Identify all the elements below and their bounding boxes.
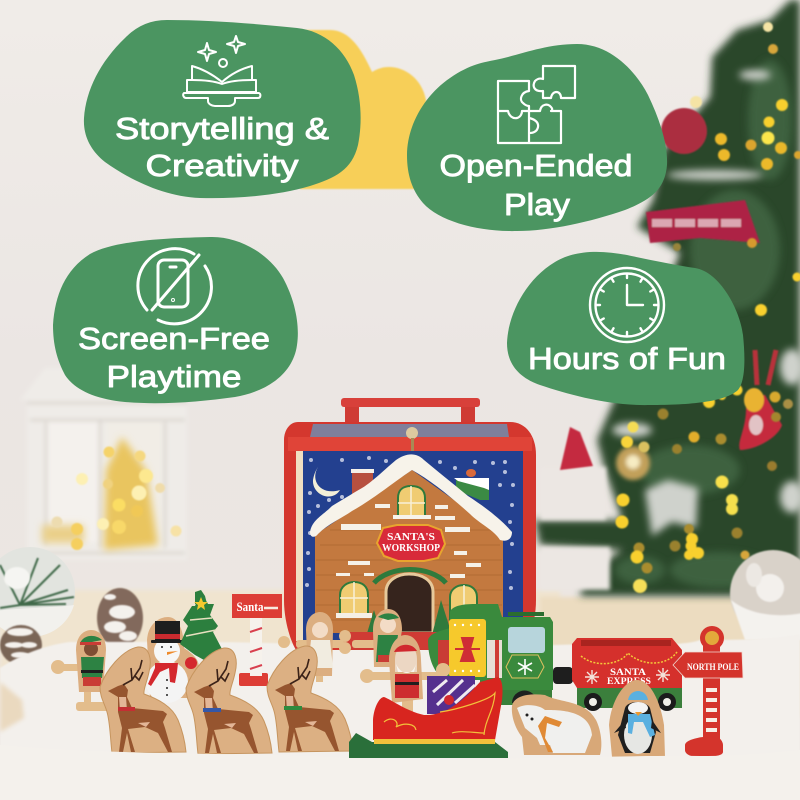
sign post: North Pole: NORTH POLE [687, 663, 739, 673]
sign: Santa's Workshop: WORKSHOP [382, 543, 441, 554]
snow globe: left with pine [0, 547, 75, 637]
crescent moon [313, 467, 340, 497]
icon: puzzle pieces [498, 66, 575, 143]
upper window [393, 486, 431, 519]
figure: reindeer 1 [100, 647, 186, 753]
sign: Santa's Workshop [377, 525, 445, 561]
train: red Santa Express wagon: EXPRESS [607, 676, 651, 686]
log cabin wall [315, 470, 503, 633]
heading: Playtime [106, 359, 242, 394]
heading [440, 148, 632, 222]
heading: Hours of Fun [528, 341, 726, 376]
small door trees [365, 600, 452, 640]
sleigh green runners [349, 733, 508, 758]
reindeer collar 2 [203, 708, 221, 712]
panel: Open-Ended Play [407, 44, 667, 231]
figure: elf with dark skin [51, 630, 110, 711]
heading: Screen-Free [78, 321, 270, 356]
train: green locomotive [428, 604, 553, 705]
ornament: stocking [739, 350, 782, 450]
cargo stripes [487, 640, 502, 678]
wheel [512, 690, 537, 703]
robin [466, 469, 476, 477]
icon: clock [590, 268, 664, 342]
figure: reindeer 3 [267, 646, 353, 752]
panel: Storytelling and Creativity [84, 20, 361, 198]
reindeer collar 3 [284, 706, 302, 710]
sleigh red body [373, 677, 503, 744]
reindeer collar 1 [118, 707, 135, 711]
snow foreground [0, 745, 800, 800]
figure: elf in green [352, 609, 404, 667]
pine cones [0, 588, 143, 665]
gift: purple striped box [427, 676, 475, 714]
ornament: red hanging star [560, 427, 593, 470]
heading: Storytelling & [115, 111, 329, 146]
suitcase body [284, 422, 536, 650]
night sky panel [301, 451, 523, 641]
snow patches [336, 504, 481, 578]
icon: open book with sparkles [183, 36, 260, 106]
heading: Open-Ended [440, 148, 632, 183]
figure: polar bear [512, 694, 601, 755]
sign: Santa's Workshop: SANTA'S [387, 532, 435, 543]
fairy lights [616, 22, 800, 593]
train: red Santa Express wagon: SANTA [610, 667, 647, 677]
sign post: North Pole [673, 626, 743, 757]
wooden table [0, 590, 800, 720]
table corner [0, 682, 24, 732]
figure: wooden Santa [360, 635, 450, 715]
lower left window [336, 582, 372, 618]
panel: Hours of Fun [507, 252, 744, 405]
ornament: red bauble [661, 108, 707, 154]
christmas tree [535, 0, 800, 596]
door [386, 574, 433, 633]
train: couplers [553, 667, 573, 684]
figure: penguin [609, 680, 665, 757]
product: red suitcase with Santa's workshop [284, 398, 536, 650]
figure: reindeer 2 [186, 648, 272, 754]
snowflake plaque [506, 655, 544, 678]
figure: snowman [146, 617, 199, 703]
snow roof [310, 454, 512, 541]
snow globe: right [730, 550, 800, 640]
sign post: Santa [232, 594, 282, 686]
clasp [406, 427, 418, 452]
figure: green Christmas tree [180, 590, 223, 660]
door wreath [374, 570, 446, 583]
heading [78, 321, 270, 394]
ornament: red tree sign [646, 200, 760, 243]
lower right window [450, 585, 477, 620]
chimney [351, 469, 374, 494]
panel: Screen-Free Playtime [53, 237, 298, 403]
lantern with glowing tree [20, 368, 187, 560]
icon: no phone [138, 249, 211, 324]
heading [115, 111, 329, 183]
ornament: gold ball [616, 446, 650, 480]
yellow gift block [449, 619, 486, 677]
figure: Mrs Claus [278, 612, 351, 682]
green roof [456, 478, 489, 500]
train: red Santa Express wagon [572, 638, 682, 711]
snow ground [0, 634, 800, 800]
suitcase handle [341, 398, 480, 437]
yellow cloud shelf [300, 30, 426, 189]
heading: Play [504, 187, 571, 222]
sign post: Santa: Santa [236, 600, 264, 614]
heading: Creativity [146, 148, 299, 183]
